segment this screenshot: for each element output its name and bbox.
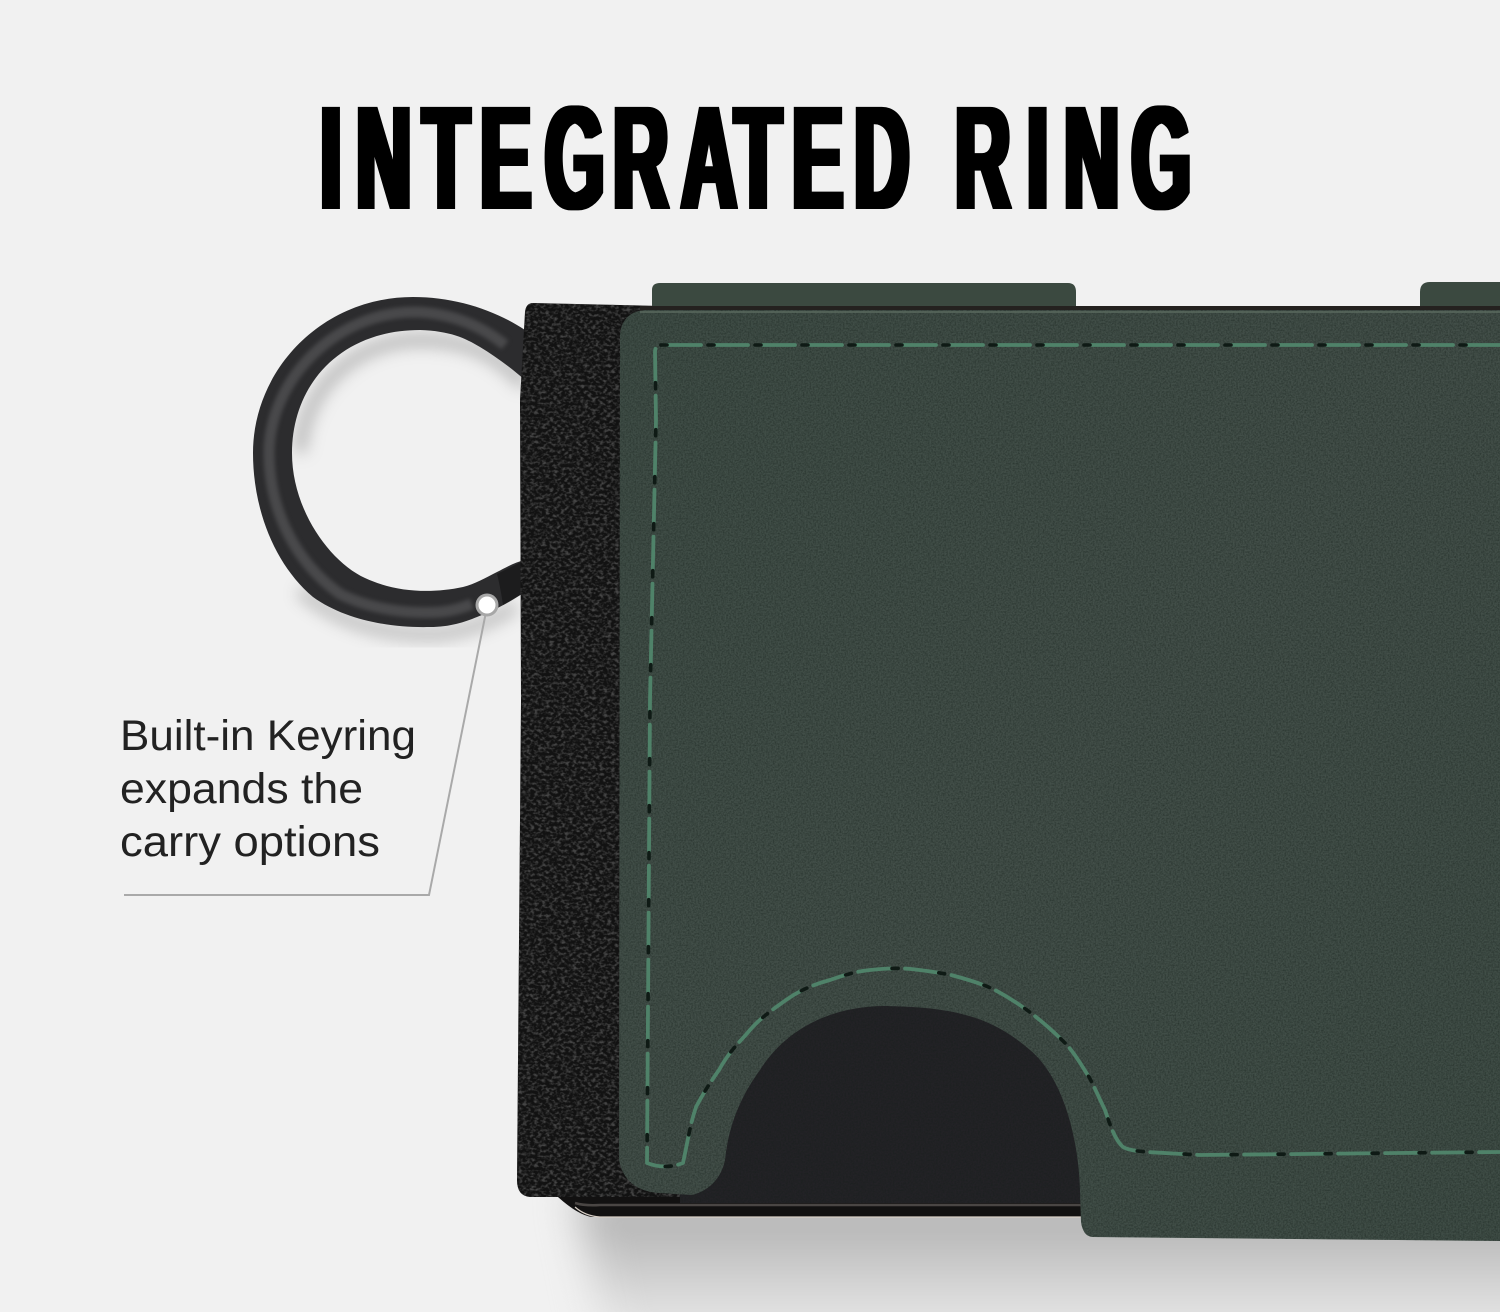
stitching: [647, 345, 1500, 1166]
leader line: [124, 612, 486, 895]
wallet: [517, 282, 1500, 1241]
ring inner shadow: [300, 340, 525, 452]
callout text: expands the: [120, 765, 363, 813]
left clip tab: [652, 283, 1076, 312]
icon: key ring: [253, 297, 525, 634]
callout text: carry options: [120, 818, 380, 866]
leather front panel: [619, 310, 1500, 1241]
ring clasp end: [497, 560, 525, 605]
metal card edge: [558, 1197, 1090, 1217]
right clip tab: [1420, 282, 1500, 312]
back strap edge: [640, 306, 1500, 312]
card lower bright edge: [575, 1207, 1082, 1217]
wallet shadow: [575, 1190, 1500, 1312]
ring highlight: [269, 312, 505, 612]
callout marker: [477, 595, 497, 615]
notch interior: [680, 1000, 1090, 1203]
card edge highlight: [575, 1203, 1082, 1205]
ring outer shadow: [300, 590, 515, 634]
title: INTEGRATED RING: [320, 76, 1191, 240]
stitch holes: [647, 345, 1500, 1166]
elastic band: [517, 303, 740, 1197]
callout: built-in keyring: [120, 595, 497, 895]
callout text: Built-in Keyring: [120, 712, 416, 760]
leather top highlight: [640, 311, 1500, 313]
ring body: [253, 297, 525, 627]
callout text: [120, 712, 416, 866]
stitch thread: [647, 345, 1500, 1166]
